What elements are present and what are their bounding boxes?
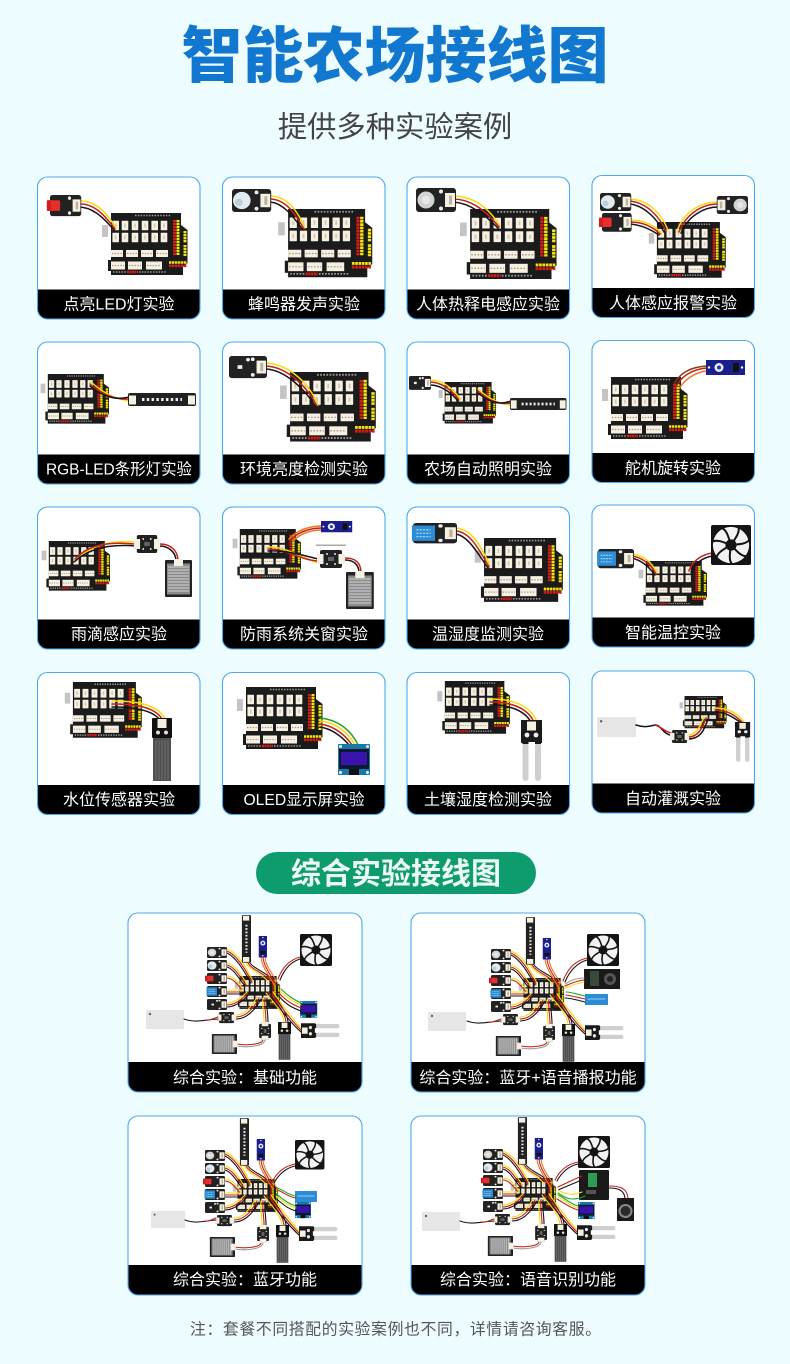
caption: RGB-LED条形灯实验 bbox=[46, 460, 192, 478]
wires bbox=[455, 528, 490, 568]
wires bbox=[555, 1162, 628, 1210]
wires bbox=[90, 382, 129, 401]
module caption mark bbox=[316, 544, 346, 546]
wires bbox=[453, 196, 500, 228]
caption bar bbox=[222, 507, 385, 649]
card: OLED experiment bbox=[222, 672, 385, 814]
icon: DHT sensor bbox=[295, 1191, 317, 1202]
card: rain window experiment bbox=[222, 507, 385, 649]
caption: 综合实验：语音识别功能 bbox=[440, 1271, 616, 1289]
icon: relay module bbox=[670, 730, 689, 743]
shield board bbox=[237, 687, 322, 749]
icon: LED strip bbox=[128, 393, 196, 406]
icon: buzzer module bbox=[232, 189, 271, 212]
icon: servo bbox=[706, 360, 745, 375]
caption: 综合实验：蓝牙功能 bbox=[173, 1271, 317, 1289]
card: raindrop experiment bbox=[38, 507, 200, 649]
caption: 水位传感器实验 bbox=[63, 791, 175, 809]
icon: battery box bbox=[422, 1212, 460, 1231]
caption: 综合实验：基础功能 bbox=[173, 1069, 317, 1087]
caption: 自动灌溉实验 bbox=[625, 790, 721, 808]
card: auto irrigation experiment bbox=[592, 671, 754, 813]
card: smart temperature control bbox=[592, 505, 754, 647]
icon: battery box bbox=[597, 717, 636, 737]
section pill heading: 综合实验接线图 bbox=[291, 858, 501, 891]
icon: fan bbox=[711, 525, 751, 565]
icon: battery box bbox=[146, 1010, 184, 1029]
icon: light sensor module bbox=[229, 356, 267, 378]
icon: fan bbox=[578, 1136, 610, 1168]
icon: light sensor module bbox=[409, 376, 431, 390]
icon: soil sensor bbox=[521, 720, 542, 781]
card: water level experiment bbox=[38, 672, 200, 814]
caption: 人体感应报警实验 bbox=[609, 294, 737, 312]
icon: OLED display bbox=[295, 1202, 311, 1218]
wires bbox=[278, 957, 301, 1011]
shield board bbox=[437, 681, 510, 734]
icon: rain plate bbox=[346, 571, 374, 609]
caption: 智能温控实验 bbox=[625, 624, 721, 642]
shield board bbox=[278, 209, 372, 277]
card: soil humidity experiment bbox=[407, 672, 570, 814]
icon: fan bbox=[295, 1140, 324, 1169]
caption bar bbox=[38, 342, 200, 484]
shield board bbox=[649, 222, 726, 278]
shield board bbox=[42, 541, 110, 591]
caption bar bbox=[128, 913, 362, 1092]
caption bar bbox=[38, 177, 200, 319]
caption: 温湿度监测实验 bbox=[432, 626, 544, 644]
icon: voice recognition board bbox=[579, 1170, 609, 1200]
wires bbox=[112, 701, 165, 719]
wires bbox=[490, 699, 537, 722]
caption bar bbox=[38, 507, 200, 649]
shield board bbox=[680, 696, 727, 728]
card: servo experiment bbox=[592, 340, 754, 482]
caption: 综合实验：蓝牙+语音播报功能 bbox=[419, 1069, 637, 1087]
title: 智能农场接线图 bbox=[181, 22, 609, 90]
section pill heading bbox=[256, 852, 536, 894]
icon: LED module bbox=[599, 213, 632, 232]
card: bluetooth and voice broadcast wiring bbox=[411, 913, 645, 1092]
battery wire bbox=[460, 1219, 494, 1223]
caption bar bbox=[407, 507, 570, 649]
card: RGB strip experiment bbox=[38, 342, 200, 484]
shield board bbox=[602, 377, 688, 439]
shield board bbox=[439, 382, 496, 424]
shield board bbox=[280, 372, 376, 441]
card: buzzer experiment bbox=[222, 177, 385, 319]
caption: 点亮LED灯实验 bbox=[63, 296, 175, 314]
icon: relay module bbox=[317, 550, 345, 568]
wires bbox=[268, 526, 361, 573]
caption: 蜂鸣器发声实验 bbox=[248, 296, 360, 314]
shield board bbox=[41, 374, 109, 424]
shield board bbox=[460, 209, 557, 279]
caption bar bbox=[407, 177, 570, 319]
subtitle: 提供多种实验案例 bbox=[278, 111, 512, 144]
comprehensive modules and board bbox=[489, 917, 623, 1062]
caption: 人体热释电感应实验 bbox=[416, 294, 560, 314]
comprehensive modules and board bbox=[481, 1117, 615, 1262]
wires bbox=[270, 196, 305, 230]
card: PIR alarm experiment bbox=[592, 176, 754, 318]
icon: DHT module bbox=[412, 523, 457, 543]
caption bar bbox=[128, 1116, 362, 1295]
footnote: 注：套餐不同搭配的实验案例也不同，详情请咨询客服。 bbox=[190, 1320, 601, 1338]
battery wire bbox=[467, 1019, 501, 1023]
wires bbox=[630, 199, 718, 235]
icon: PIR module bbox=[416, 188, 456, 212]
icon: DHT module bbox=[597, 549, 634, 568]
battery wire bbox=[185, 1218, 216, 1222]
shield board bbox=[233, 529, 301, 579]
caption bar bbox=[222, 342, 385, 484]
wires bbox=[636, 708, 744, 739]
wires bbox=[563, 958, 587, 1002]
caption bar bbox=[592, 176, 754, 318]
caption: 环境亮度检测实验 bbox=[240, 460, 368, 478]
shield board bbox=[639, 561, 707, 606]
shield board bbox=[65, 682, 142, 738]
caption bar bbox=[222, 177, 385, 319]
caption bar bbox=[38, 672, 200, 814]
card: PIR experiment bbox=[407, 177, 570, 319]
comprehensive modules and board bbox=[205, 915, 339, 1060]
shield board bbox=[475, 538, 563, 602]
caption bar bbox=[411, 1116, 645, 1295]
caption bar bbox=[592, 505, 754, 647]
wires bbox=[74, 542, 178, 562]
wires bbox=[78, 201, 116, 230]
battery wire bbox=[184, 1017, 218, 1021]
icon: battery box bbox=[151, 1211, 185, 1228]
caption bar bbox=[407, 342, 570, 484]
icon: LED module bbox=[47, 195, 81, 216]
icon: fan bbox=[300, 934, 332, 966]
card: LED experiment bbox=[38, 177, 200, 319]
caption bar bbox=[411, 913, 645, 1092]
wires bbox=[430, 380, 511, 405]
wires bbox=[266, 363, 318, 407]
caption: 舵机旋转实验 bbox=[625, 460, 721, 478]
icon: battery box bbox=[428, 1012, 466, 1031]
caption: 农场自动照明实验 bbox=[424, 460, 552, 478]
icon: rain plate bbox=[165, 559, 192, 597]
caption bar bbox=[222, 672, 385, 814]
icon: speaker bbox=[617, 1198, 634, 1221]
wires bbox=[320, 718, 358, 745]
card: light sensing experiment bbox=[222, 342, 385, 484]
shield board bbox=[102, 213, 188, 275]
caption bar bbox=[592, 671, 754, 813]
card: auto lighting experiment bbox=[407, 342, 570, 484]
icon: DHT sensor bbox=[585, 994, 608, 1005]
wires bbox=[674, 366, 707, 389]
icon: OLED display bbox=[300, 1001, 317, 1018]
icon: water level sensor bbox=[152, 718, 172, 781]
caption: 土壤湿度检测实验 bbox=[424, 790, 552, 809]
wires bbox=[272, 1164, 296, 1211]
icon: OLED display bbox=[338, 744, 370, 775]
icon: bluetooth voice module bbox=[584, 969, 620, 989]
icon: relay module bbox=[134, 535, 160, 553]
card: bluetooth wiring bbox=[128, 1116, 362, 1295]
caption bar bbox=[592, 340, 754, 482]
wires bbox=[632, 553, 712, 575]
icon: servo bbox=[321, 521, 352, 532]
card: temperature and humidity experiment bbox=[407, 507, 570, 649]
caption: 防雨系统关窗实验 bbox=[240, 626, 368, 644]
caption: OLED显示屏实验 bbox=[244, 791, 364, 809]
icon: PIR module bbox=[717, 196, 748, 214]
icon: OLED display bbox=[578, 1202, 595, 1219]
card: voice recognition wiring bbox=[411, 1116, 645, 1295]
icon: soil sensor bbox=[735, 722, 750, 762]
card: basic comprehensive wiring bbox=[128, 913, 362, 1092]
caption: 雨滴感应实验 bbox=[71, 624, 167, 644]
caption bar bbox=[407, 672, 570, 814]
icon: buzzer module bbox=[600, 193, 631, 211]
icon: fan bbox=[587, 934, 619, 966]
comprehensive modules and board bbox=[203, 1118, 337, 1263]
icon: LED strip bbox=[510, 398, 566, 410]
